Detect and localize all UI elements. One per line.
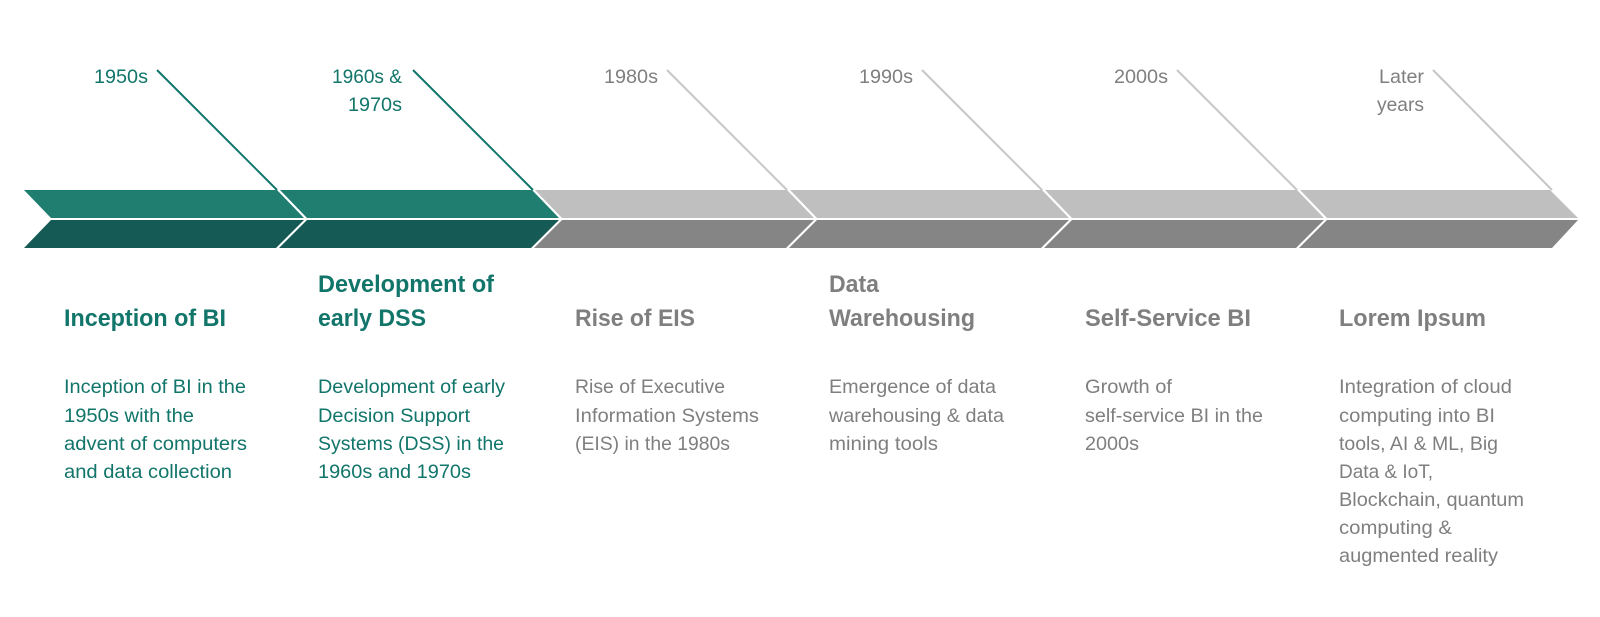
description: Inception of BI: [64, 376, 247, 483]
heading: Data Warehousing: Warehousing: [829, 305, 975, 332]
year label: 1960s and 1970s: 1960s &: [332, 66, 402, 88]
heading: Development of early DSS: Development of: [318, 271, 495, 298]
year label: 1950s: 1950s: [94, 66, 148, 88]
description: Development of early DSS: Systems (DSS) in the: [318, 433, 504, 455]
year label: later years: Later: [1379, 66, 1425, 88]
year label: 1960s and 1970s: [332, 66, 402, 116]
year label: 1960s and 1970s: 1970s: [348, 94, 402, 116]
heading: Lorem Ipsum: Lorem Ipsum: [1339, 305, 1486, 332]
description: Lorem Ipsum: augmented reality: [1339, 545, 1498, 567]
description: Rise of EIS: [575, 376, 759, 455]
heading: Self-Service BI: Self-Service BI: [1085, 305, 1251, 332]
description: Rise of EIS: Rise of Executive: [575, 376, 725, 398]
year label: later years: years: [1377, 94, 1424, 116]
year label: 1980s: 1980s: [604, 66, 658, 88]
description: Development of early DSS: [318, 376, 505, 483]
description: Inception of BI: Inception of BI in the: [64, 376, 246, 398]
description: Inception of BI: advent of computers: [64, 433, 247, 455]
chevron band: [24, 190, 1578, 248]
heading: Data Warehousing: Data: [829, 271, 880, 298]
description: Self-Service BI: self-service BI in the: [1085, 405, 1263, 427]
connector lines group: [157, 70, 1552, 190]
description: Data Warehousing: [828, 376, 1004, 455]
description: Development of early DSS: Development of early: [318, 376, 505, 398]
description: Lorem Ipsum: [1339, 376, 1524, 567]
description: Data Warehousing: Emergence of data: [829, 376, 996, 398]
heading: Inception of BI: Inception of BI: [64, 305, 226, 332]
description: Rise of EIS: Information Systems: [575, 405, 759, 427]
description: Lorem Ipsum: tools, AI & ML, Big: [1339, 433, 1498, 455]
description: Lorem Ipsum: computing &: [1339, 517, 1452, 539]
heading: Development of early DSS: [318, 271, 495, 332]
description: Lorem Ipsum: computing into BI: [1339, 405, 1495, 427]
description: Self-Service BI: 2000s: [1085, 433, 1139, 455]
description: Lorem Ipsum: Blockchain, quantum: [1339, 489, 1524, 511]
description: Rise of EIS: (EIS) in the 1980s: [575, 433, 730, 455]
year label: 1990s: 1990s: [859, 66, 913, 88]
description: Data Warehousing: mining tools: [829, 433, 938, 455]
description: Self-Service BI: Growth of: [1085, 376, 1173, 398]
year label: later years: [1377, 66, 1425, 116]
description: Self-Service BI: [1085, 376, 1263, 455]
description: Lorem Ipsum: Data & IoT,: [1339, 461, 1433, 483]
description: Development of early DSS: 1960s and 1970s: [318, 461, 471, 483]
heading: Rise of EIS: Rise of EIS: [575, 305, 695, 332]
description: Lorem Ipsum: Integration of cloud: [1339, 376, 1512, 398]
heading: Development of early DSS: early DSS: [318, 305, 426, 332]
description: Development of early DSS: Decision Support: [318, 405, 471, 427]
heading: Data Warehousing: [829, 271, 975, 332]
year label: 2000s: 2000s: [1114, 66, 1168, 88]
description: Data Warehousing: warehousing & data: [828, 405, 1004, 427]
description: Inception of BI: 1950s with the: [64, 405, 194, 427]
description: Inception of BI: and data collection: [64, 461, 232, 483]
